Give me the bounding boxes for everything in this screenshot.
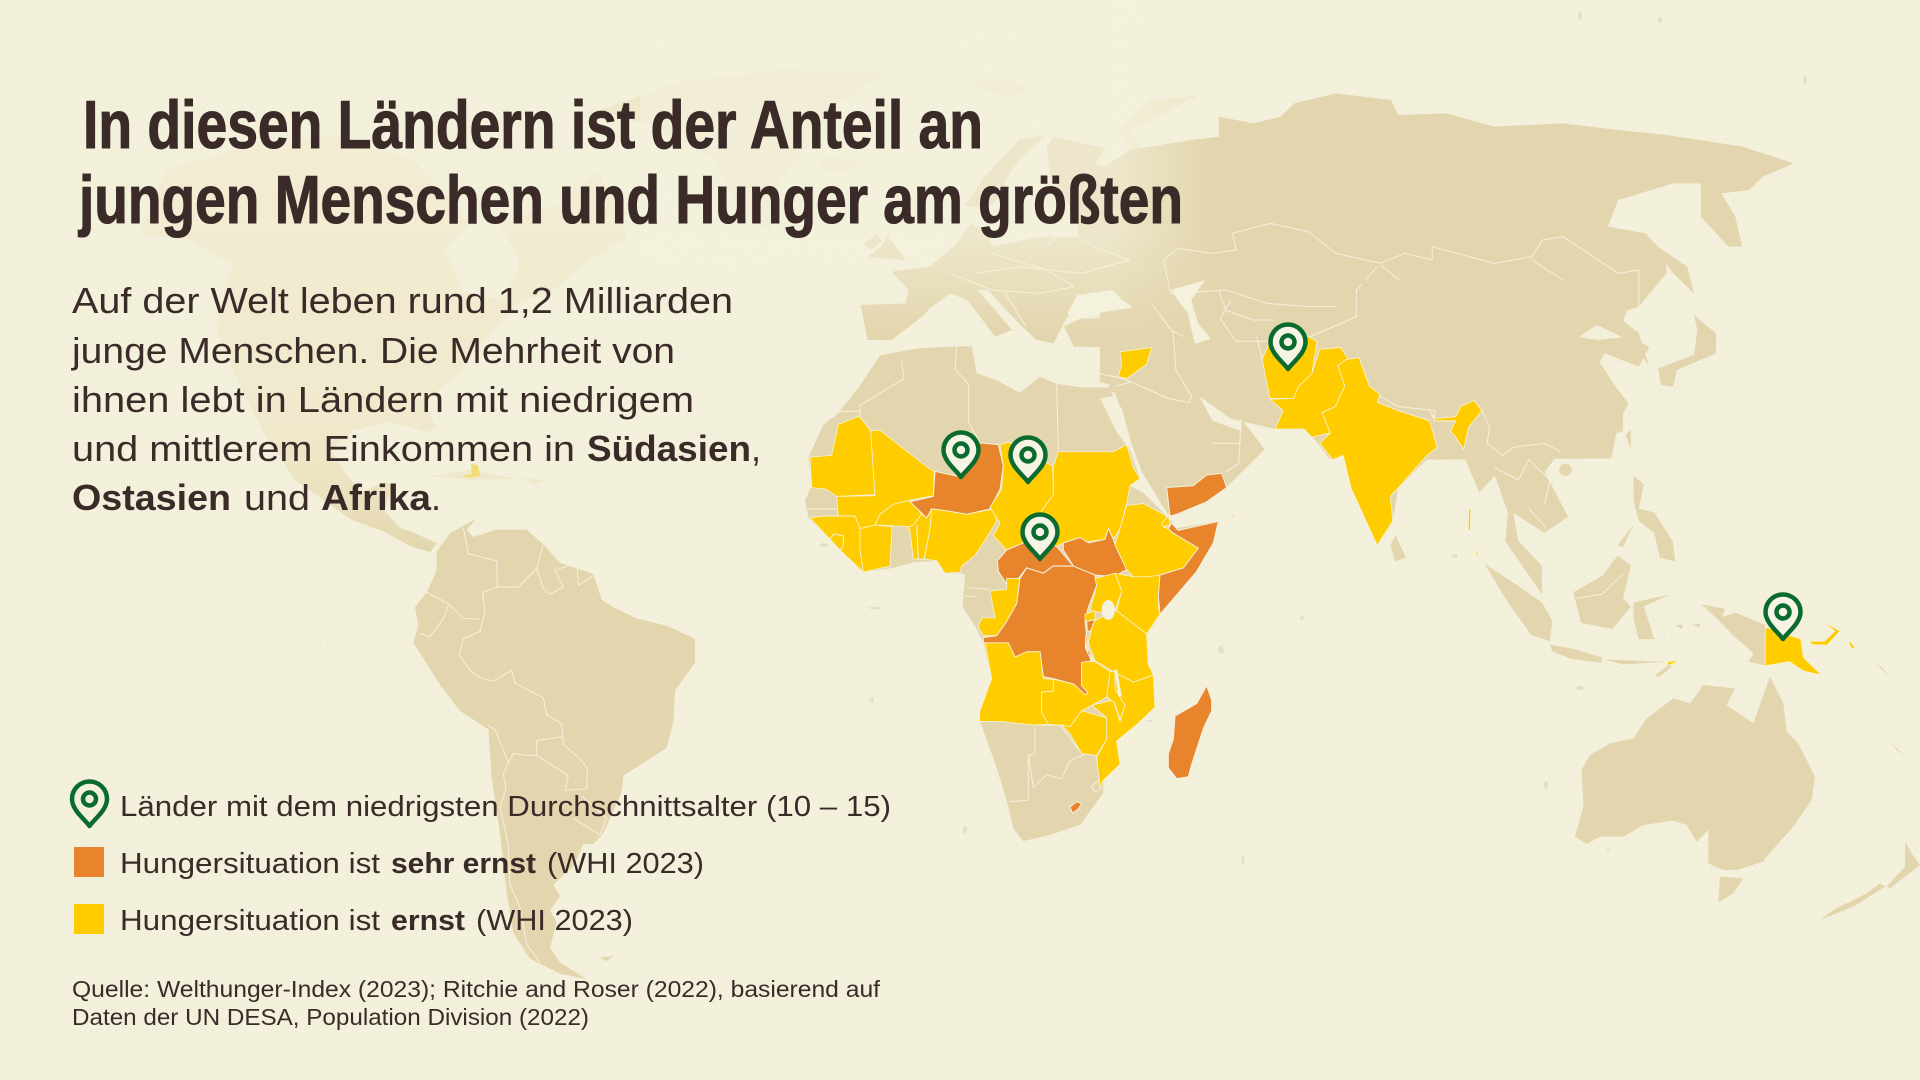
landmass: Greenland and Arctic islands — [600, 70, 1200, 230]
pin: Chad — [1010, 438, 1046, 482]
map pins — [944, 324, 1800, 639]
fade behind title over Europe — [640, 70, 1184, 306]
intro paragraph: Ostasien — [72, 477, 231, 518]
country: Chad — [990, 442, 1053, 550]
country: South Sudan — [1063, 529, 1127, 577]
intro paragraph: und — [244, 477, 310, 518]
countries: southern Africa, serious — [979, 643, 1155, 787]
title — [77, 87, 1183, 238]
title: jungen Menschen und Hunger am größten — [77, 162, 1183, 238]
intro paragraph: junge Menschen. Die Mehrheit von — [71, 330, 675, 371]
country: Burundi — [1087, 620, 1095, 632]
intro paragraph: , — [751, 428, 761, 469]
intro paragraph: und mittlerem Einkommen in — [72, 428, 575, 469]
hunger countries: South Asia and Pacific — [1262, 327, 1856, 683]
source note — [72, 976, 881, 1030]
pin: Papua New Guinea — [1766, 594, 1800, 639]
landmass: North America (faded behind text) — [140, 135, 628, 552]
pin: Central African Republic — [1022, 514, 1058, 559]
landmass: Australia and New Zealand — [1575, 677, 1920, 920]
intro paragraph: Südasien — [587, 428, 751, 469]
source note: Daten der UN DESA, Population Division (2022) — [72, 1004, 589, 1030]
landmass: Africa base and Levant — [805, 336, 1218, 841]
legend label: serious: ernst — [391, 905, 465, 937]
country: Madagascar — [1168, 686, 1212, 779]
title: In diesen Ländern ist der Anteil an — [83, 87, 983, 163]
country: Lesotho — [1070, 802, 1082, 813]
country: Timor-Leste — [1667, 660, 1681, 666]
intro paragraph: . — [431, 477, 441, 518]
legend label: youngest countries: Länder mit dem niedrigsten Durchschnittsalter (10 – 15) — [120, 791, 891, 823]
islands: Andaman and Nicobar — [1468, 509, 1479, 556]
legend label: serious: (WHI 2023) — [476, 905, 633, 937]
legend label: serious — [120, 905, 633, 937]
source note: Quelle: Welthunger-Index (2023); Ritchie and Roser (2022), basierend auf — [72, 976, 881, 1002]
landmass: southern Asia — [1100, 280, 1890, 677]
pin: Niger — [944, 432, 978, 477]
country: Republic of Congo — [978, 579, 1020, 636]
country: DR Congo — [983, 566, 1097, 695]
country: Somalia — [1158, 521, 1218, 614]
legend swatch: serious — [74, 904, 104, 934]
pin: Afghanistan — [1270, 324, 1306, 369]
legend label: serious: Hungersituation ist — [120, 905, 380, 937]
intro paragraph: ihnen lebt in Ländern mit niedrigem — [72, 379, 694, 420]
landmass: Eurasia north — [861, 93, 1794, 460]
landmass: South America — [413, 518, 695, 979]
country: Pakistan — [1270, 347, 1348, 437]
countries: Yemen and Socotra — [1167, 473, 1237, 517]
intro paragraph — [71, 280, 761, 518]
country: Syria — [1118, 347, 1152, 379]
intro paragraph: Auf der Welt leben rund 1,2 Milliarden — [72, 280, 733, 321]
country: Sudan — [1037, 445, 1140, 546]
country: Papua New Guinea — [1765, 621, 1856, 683]
country: India — [1320, 358, 1437, 545]
country: Afghanistan — [1262, 327, 1317, 398]
legend label: very serious — [120, 848, 704, 880]
region: north-east India — [1429, 400, 1482, 449]
hunger countries: Africa — [810, 347, 1237, 813]
countries: West Africa, serious — [810, 416, 997, 573]
legend swatch: very serious — [74, 847, 104, 877]
legend — [72, 782, 891, 937]
legend label: very serious: Hungersituation ist — [120, 848, 380, 880]
intro paragraph: Afrika — [321, 477, 432, 518]
country: Niger — [910, 443, 1003, 518]
legend icon: pin — [72, 782, 107, 826]
legend label: very serious: (WHI 2023) — [547, 848, 704, 880]
countries: East Africa, serious — [1085, 504, 1198, 696]
country: Central African Republic — [997, 539, 1073, 584]
legend label: very serious: sehr ernst — [391, 848, 536, 880]
